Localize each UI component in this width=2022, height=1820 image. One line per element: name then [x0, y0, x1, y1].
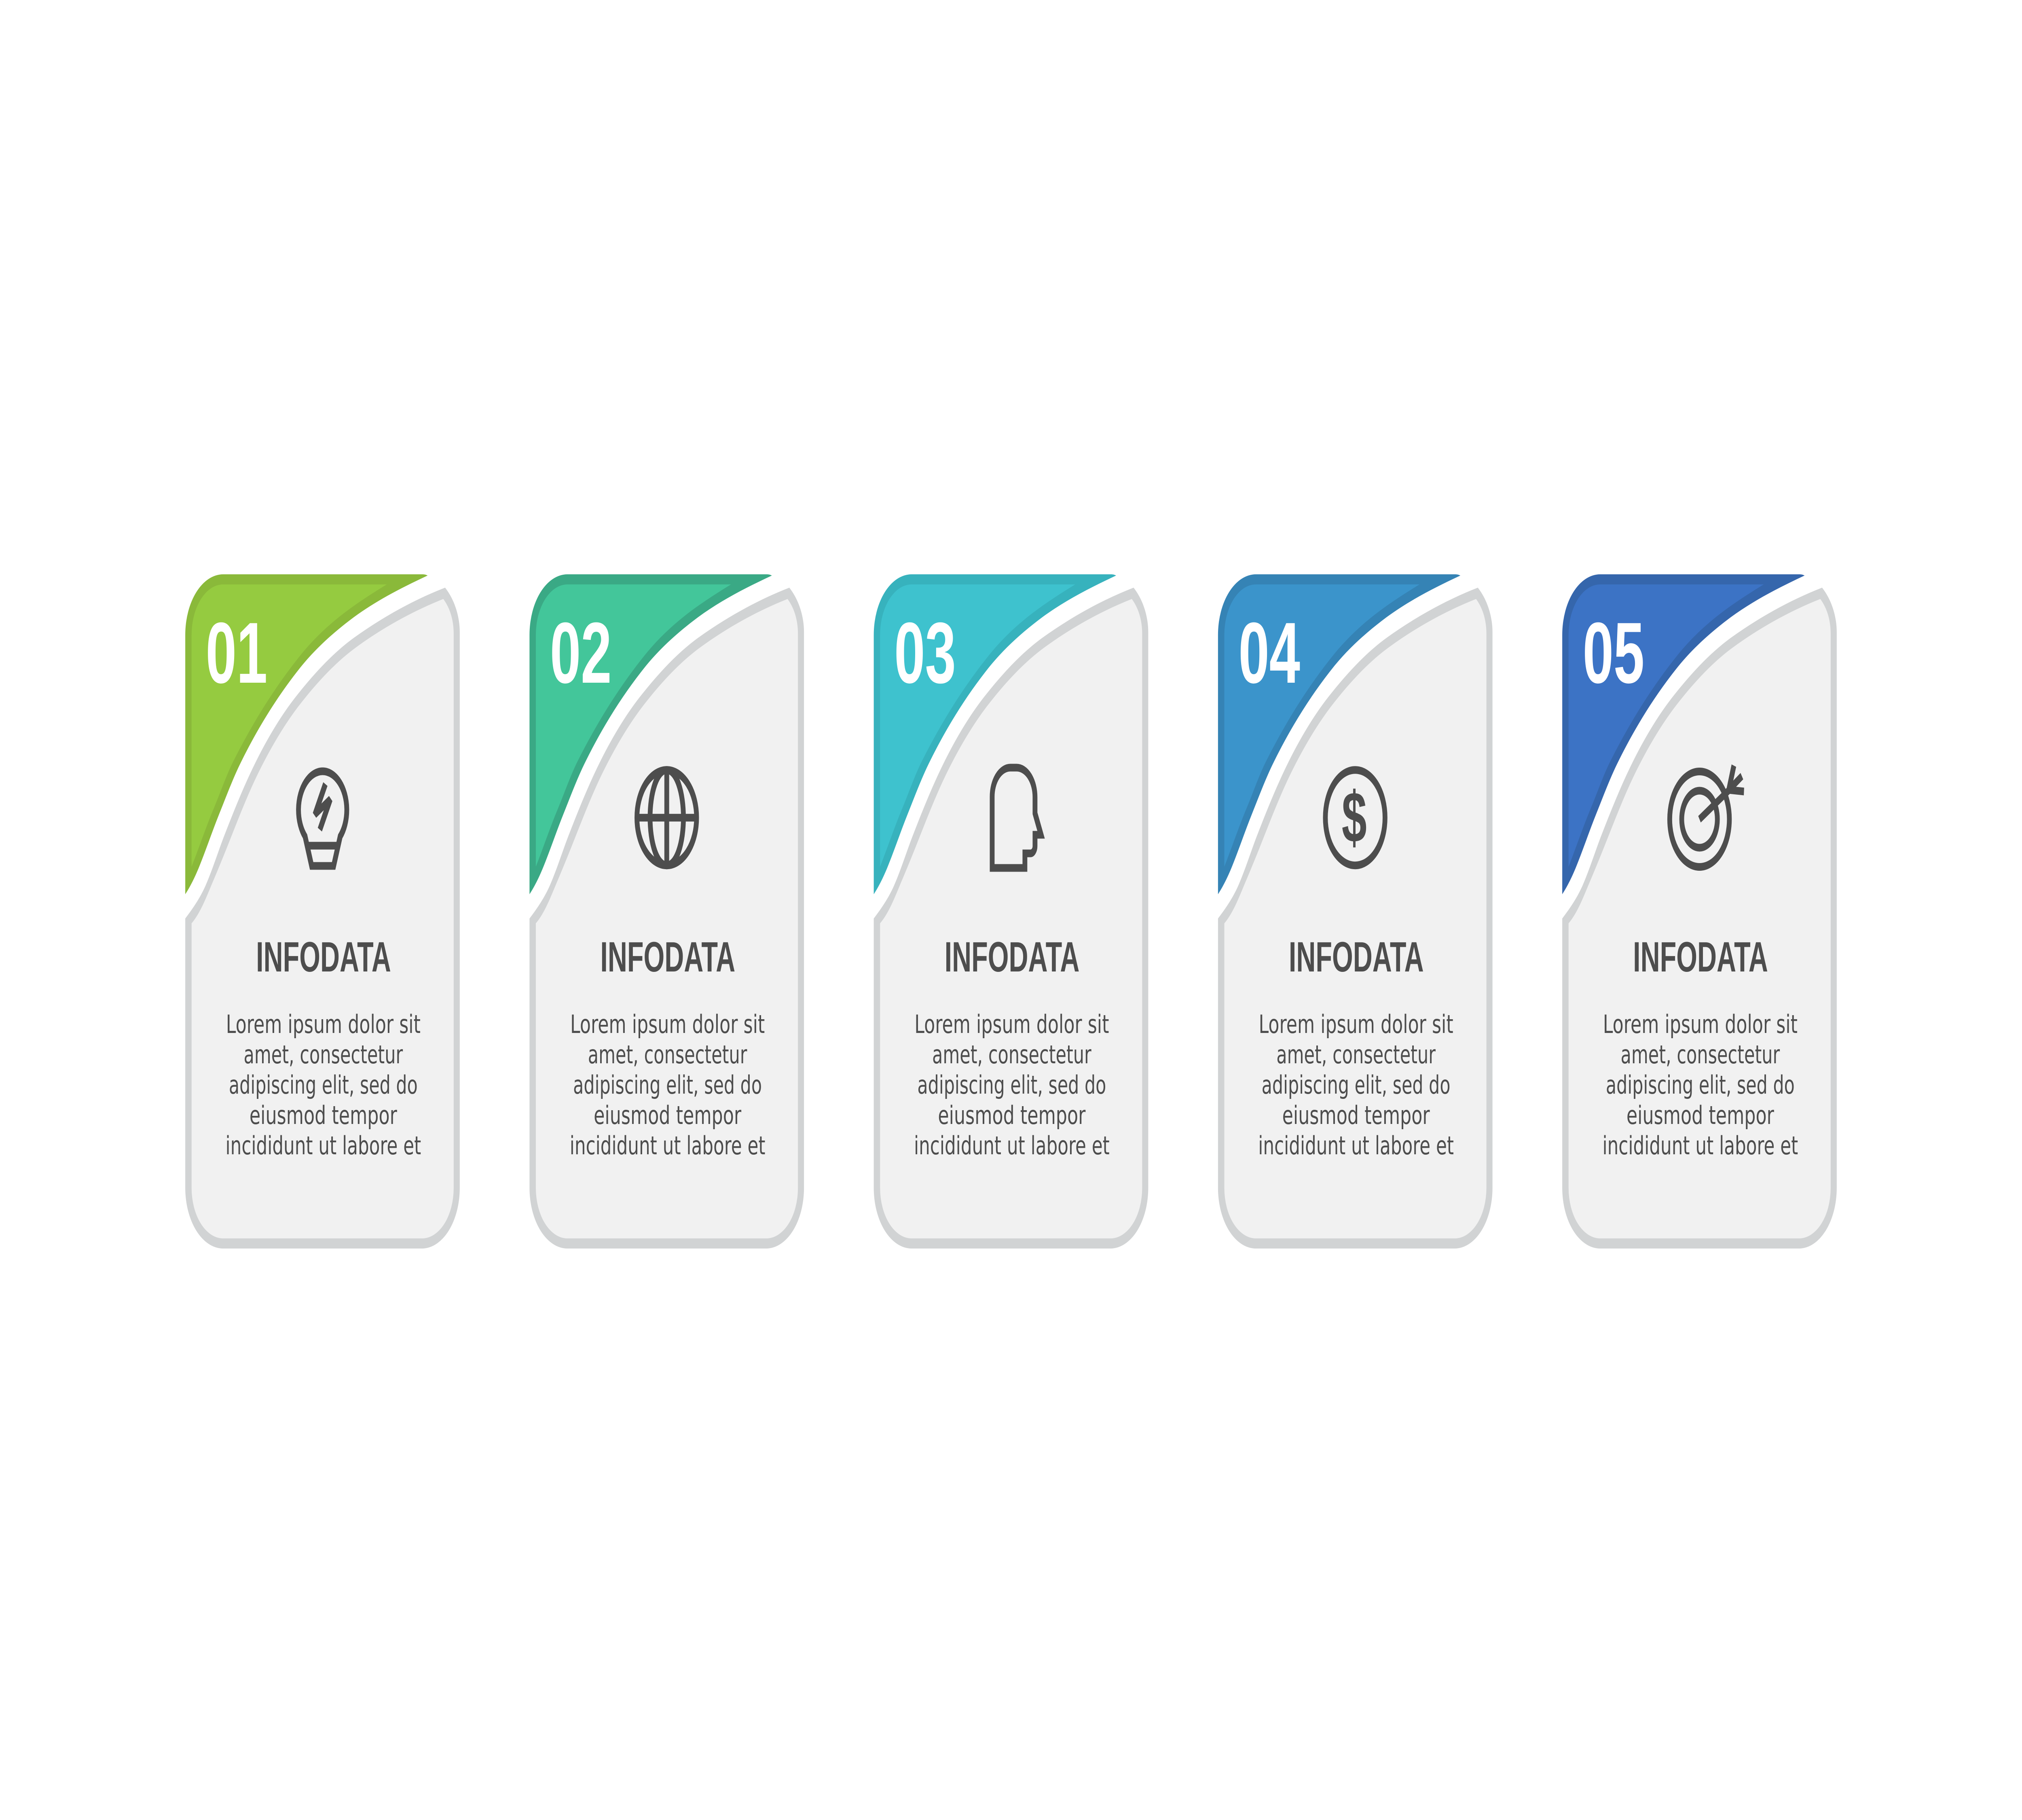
text block: Lorem ipsum dolor sit: [226, 1010, 421, 1039]
panel: card 03 body: [874, 588, 1148, 1249]
text block: Lorem ipsum dolor sit: [1603, 1010, 1798, 1039]
icon: target with arrow: [1670, 766, 1744, 867]
icon: head profile: [992, 768, 1041, 868]
panel: card 01 body: [185, 588, 460, 1249]
panel: card 05 body: [1562, 588, 1837, 1249]
text block: [570, 1010, 765, 1161]
text block: adipiscing elit, sed do: [1606, 1071, 1795, 1100]
icon: dollar coin: [1325, 770, 1385, 866]
number 01: 01: [206, 604, 267, 701]
heading: INFODATA: [945, 933, 1079, 981]
icon: light bulb: [298, 771, 347, 866]
text block: Lorem ipsum dolor sit: [914, 1010, 1109, 1039]
text block: [1602, 1010, 1798, 1161]
text block: adipiscing elit, sed do: [229, 1071, 418, 1100]
number 03: 03: [894, 604, 956, 701]
text block: adipiscing elit, sed do: [917, 1071, 1106, 1100]
number 04: 04: [1238, 604, 1300, 701]
text block: [1258, 1010, 1454, 1161]
card 02: [529, 574, 804, 1249]
heading: INFODATA: [1289, 933, 1424, 981]
panel: card 04 body: [1218, 588, 1493, 1249]
number 02: 02: [550, 604, 612, 701]
heading: INFODATA: [600, 933, 735, 981]
text block: adipiscing elit, sed do: [1262, 1071, 1451, 1100]
card 05: [1562, 574, 1837, 1249]
text block: Lorem ipsum dolor sit: [570, 1010, 765, 1039]
text block: incididunt ut labore et: [570, 1132, 766, 1161]
text block: [225, 1010, 421, 1161]
text block: [914, 1010, 1110, 1161]
text block: amet, consectetur: [1276, 1041, 1436, 1070]
text block: eiusmod tempor: [1282, 1101, 1430, 1130]
text block: amet, consectetur: [932, 1041, 1091, 1070]
text block: eiusmod tempor: [594, 1101, 742, 1130]
text block: Lorem ipsum dolor sit: [1259, 1010, 1453, 1039]
heading: INFODATA: [1633, 933, 1768, 981]
panel: card 02 emerald corner tab: [529, 574, 772, 894]
panel: card 04 sky blue corner tab: [1218, 574, 1460, 894]
text block: eiusmod tempor: [938, 1101, 1086, 1130]
text block: incididunt ut labore et: [1602, 1132, 1798, 1161]
text block: eiusmod tempor: [1626, 1101, 1775, 1130]
text block: amet, consectetur: [1621, 1041, 1780, 1070]
icon: dollar coin: $: [1342, 777, 1367, 857]
panel: card 03 cyan corner tab: [874, 574, 1116, 894]
number 05: 05: [1583, 604, 1644, 701]
text block: adipiscing elit, sed do: [573, 1071, 762, 1100]
text block: eiusmod tempor: [250, 1101, 398, 1130]
text block: incididunt ut labore et: [225, 1132, 421, 1161]
icon: globe: [637, 770, 696, 866]
text block: amet, consectetur: [588, 1041, 747, 1070]
card 03: [874, 574, 1148, 1249]
text block: incididunt ut labore et: [1258, 1132, 1454, 1161]
panel: card 02 body: [529, 588, 804, 1249]
card 01: [185, 574, 460, 1249]
heading: INFODATA: [256, 933, 391, 981]
panel: card 01 green corner tab: [185, 574, 428, 894]
panel: card 05 blue corner tab: [1562, 574, 1804, 894]
card 04: [1218, 574, 1493, 1249]
text block: amet, consectetur: [243, 1041, 403, 1070]
text block: incididunt ut labore et: [914, 1132, 1110, 1161]
